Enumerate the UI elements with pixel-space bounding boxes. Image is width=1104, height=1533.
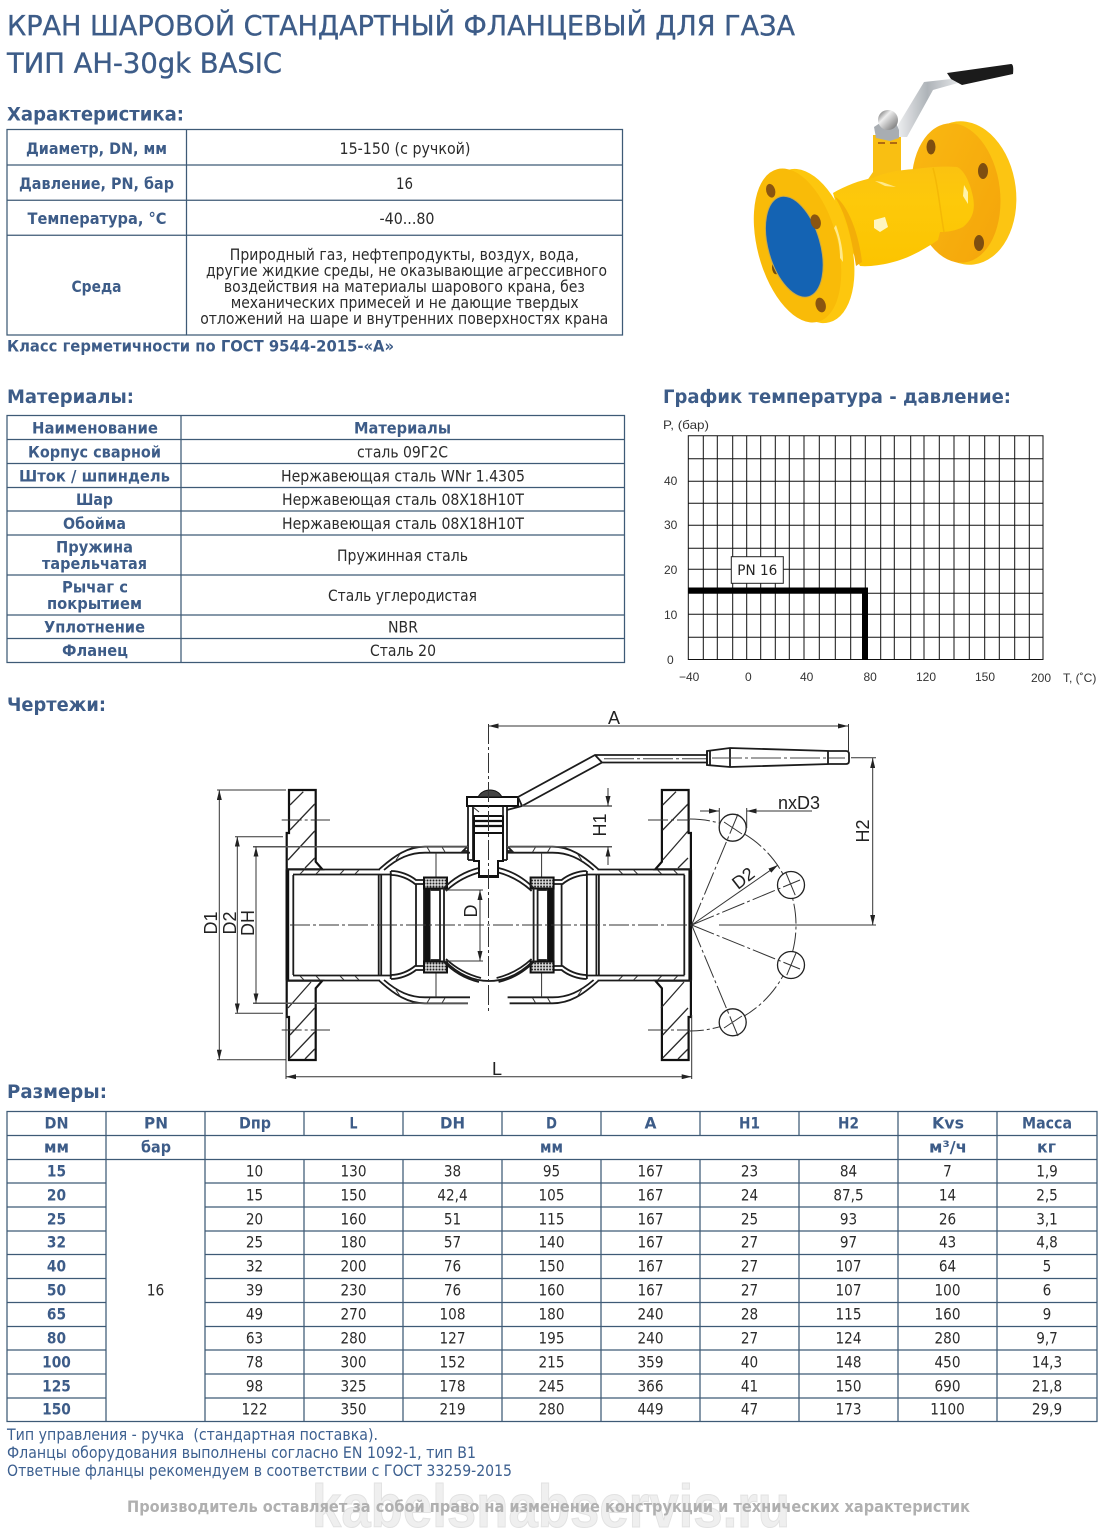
column: H1: 25 [741,1210,758,1229]
dimension D2 bolt circle: D2 [728,863,759,893]
tightness class note: Класс герметичности по ГОСТ 9544-2015-«А» [7,337,394,356]
units row [44,1138,1056,1156]
table: materials: Наименование [32,418,158,437]
column: L: 180 [341,1233,366,1252]
heading: materials: Материалы: [7,386,134,408]
column: H2 [833,1162,864,1419]
column: mass: 3,1 [1036,1210,1058,1229]
column: D: 215 [539,1353,564,1372]
column: DH: 76 [444,1281,461,1300]
header row: Масса [1022,1114,1072,1132]
manufacturer disclaimer: Производитель оставляет за собой право на изменение конструкции и технических характеристик [127,1497,970,1516]
column: DN [42,1161,71,1419]
column: Kvs: 100 [935,1281,960,1300]
dimension D [445,890,483,961]
column: H2: 84 [840,1162,857,1181]
column: L: 130 [341,1162,366,1181]
column: mass: 5 [1043,1257,1051,1276]
table: materials: Сталь углеродистая [328,586,477,605]
chart: temperature vs pressure [663,418,1096,685]
heading: characteristics: Характеристика: [7,104,184,126]
column: H1: 41 [741,1377,758,1396]
column: H1: 28 [741,1305,758,1324]
dimension nxD3: nxD3 [778,793,820,813]
table: materials: Шар [76,490,113,509]
header row: DH [440,1114,465,1132]
column: Kvs: 64 [939,1257,956,1276]
column: Dпр: 32 [246,1257,263,1276]
table: materials: покрытием [47,594,142,613]
dimension D2: D2 [220,911,240,935]
column: H2: 150 [836,1377,861,1396]
body crease [933,168,944,232]
bolt circle [690,814,804,1036]
column: DH: 178 [440,1377,465,1396]
column: H2: 107 [836,1281,861,1300]
table: characteristics: другие жидкие среды, не оказывающие агрессивного [206,261,607,280]
X axis labels: 0 [745,670,752,684]
table: materials: Шток / шпиндель [19,466,170,485]
column: DH: 108 [440,1305,465,1324]
table: characteristics: Природный газ, нефтепродукты, воздух, вода, [230,245,579,264]
column: A: 167 [638,1257,663,1276]
column: mass: 9,7 [1036,1329,1058,1348]
header row: DN [44,1114,68,1132]
photo: gas ball valve [738,64,1024,333]
column: L [341,1162,366,1419]
dimension A: A [608,708,620,728]
heading: dimensions: Размеры: [7,1081,107,1103]
column: Kvs: 43 [939,1233,956,1252]
column: H1 [741,1162,758,1419]
PN 16 label [731,557,783,583]
column: A: 167 [638,1281,663,1300]
left flange [738,159,870,333]
column: Dпр: 15 [246,1186,263,1205]
table: materials: Обойма [63,514,126,533]
column: D: 195 [539,1329,564,1348]
table: materials [7,416,624,662]
column: Kvs: 14 [939,1186,956,1205]
X axis labels: 150 [975,670,995,684]
table: characteristics: 16 [396,174,413,193]
column: H1: 24 [741,1186,758,1205]
Y axis labels [663,418,709,667]
dimension DH: DH [238,910,258,936]
table grid [7,1112,1097,1422]
table: characteristics: Среда [72,277,122,296]
table: materials: Пружина [56,538,133,557]
units row: кг [1037,1138,1056,1156]
column: DH: 152 [440,1353,465,1372]
column: H1: 27 [741,1329,758,1348]
column: DN: 25 [47,1209,66,1229]
column: H2: 107 [836,1257,861,1276]
table: characteristics: Температура, °С [28,209,166,228]
table: characteristics: -40...80 [380,209,434,228]
column: L: 230 [341,1281,366,1300]
column: H2: 97 [840,1233,857,1252]
column: D: 105 [539,1186,564,1205]
stem and neck [463,790,518,878]
heading: drawings: Чертежи: [7,694,106,716]
X axis labels [679,670,1096,685]
dimension nxD3 [700,793,820,828]
column: DN: 150 [42,1399,71,1419]
footnotes [6,1425,512,1480]
flange holes [765,183,827,314]
Y axis labels: 40 [664,474,678,488]
table: materials: тарельчатая [42,554,147,573]
column: DN: 50 [47,1280,66,1300]
table: characteristics: воздействия на материалы шарового крана, без [224,277,585,296]
column: DN: 80 [47,1328,66,1348]
column: L: 200 [341,1257,366,1276]
dimension L [286,1015,692,1079]
dimension H1 [507,788,612,865]
heading: temperature-pressure chart: График температура - давление: [663,386,1011,408]
blue cap [755,190,834,304]
Y axis labels: 20 [664,563,678,577]
column: mass: 6 [1043,1281,1051,1300]
column: A: 167 [638,1186,663,1205]
column: A: 359 [638,1353,663,1372]
column: Dпр: 39 [246,1281,263,1300]
column: A: 167 [638,1233,663,1252]
column: L: 280 [341,1329,366,1348]
dimension H2 [719,758,876,925]
X axis labels: 80 [864,670,877,684]
column: D [539,1162,564,1419]
column: DN: 40 [47,1256,66,1276]
valve body quarter (mirrored) [286,790,481,925]
column: mass: 2,5 [1036,1186,1058,1205]
column: DH: 219 [440,1400,465,1419]
ball lower bore line [445,961,533,981]
nut [874,123,899,141]
dimension H2: H2 [853,819,873,843]
header row: D [546,1114,557,1132]
column: L: 150 [341,1186,366,1205]
column: Kvs: 690 [935,1377,960,1396]
column: mass: 1,9 [1036,1162,1058,1181]
column: A [638,1162,663,1419]
column: DH: 42,4 [437,1186,468,1205]
X axis labels: 200 [1031,671,1051,685]
dimension L: L [492,1059,502,1079]
column: Kvs: 26 [939,1210,956,1229]
table: materials: Нержавеющая сталь 08Х18Н10Т [282,490,524,509]
column: mass: 29,9 [1032,1400,1062,1419]
footnotes: Фланцы оборудования выполнены согласно EN 1092-1, тип В1 [7,1443,476,1462]
header row: L [350,1114,358,1132]
dimension D1: D1 [201,911,221,935]
column: H2: 124 [836,1329,861,1348]
chart grid [688,436,1043,660]
units row: бар [141,1138,171,1156]
column: Kvs: 7 [943,1162,952,1181]
center lines [282,724,691,1030]
column: mass: 4,8 [1036,1233,1058,1252]
Y axis labels: P, (бар) [663,418,709,432]
body [833,167,974,266]
table: characteristics: 15-150 (с ручкой) [340,139,470,158]
units row: м³/ч [929,1138,967,1156]
column: A: 240 [638,1329,663,1348]
lever with grip [507,748,849,810]
table: characteristics: механических примесей и не дающие твердых [231,293,579,312]
rim highlight [834,225,843,262]
table: materials: NBR [388,618,418,637]
column: Dпр: 25 [246,1233,263,1252]
column: DN: 32 [47,1232,66,1252]
column: A: 449 [638,1400,663,1419]
column: H2: 93 [840,1210,857,1229]
column: Dпр: 10 [246,1162,263,1181]
column: L: 325 [341,1377,366,1396]
units row: мм [44,1138,69,1156]
column: Kvs: 160 [935,1305,960,1324]
column: L: 160 [341,1210,366,1229]
table: materials: Фланец [62,641,128,660]
PN 16 limit line [688,590,865,660]
column: mass: 14,3 [1032,1353,1062,1372]
column: DH: 57 [444,1233,461,1252]
X axis labels: −40 [679,670,700,684]
footnotes: Тип управления - ручка (стандартная поставка). [6,1425,378,1444]
column: mass: 9 [1043,1305,1051,1324]
column: H2: 115 [836,1305,861,1324]
table: materials: Корпус сварной [28,442,161,461]
column: DH [437,1162,468,1419]
body highlights [874,217,888,232]
table: materials: Нержавеющая сталь 08Х18Н10Т [282,514,524,533]
X axis labels: 120 [916,670,936,684]
column: Dпр [242,1162,267,1419]
column: L: 270 [341,1305,366,1324]
table: materials: Рычаг с [62,578,128,597]
column: H1: 47 [741,1400,758,1419]
table: materials: Пружинная сталь [337,546,468,565]
lever [895,78,960,137]
column: D: 245 [539,1377,564,1396]
column: DH: 127 [440,1329,465,1348]
dimension D2 bolt circle [692,863,778,925]
column: Kvs: 1100 [930,1400,965,1419]
column: H2: 148 [836,1353,861,1372]
column: DN: 65 [47,1304,66,1324]
header row: Dпр [239,1114,271,1132]
column: A: 167 [638,1210,663,1229]
column: DH: 51 [444,1210,461,1229]
column: Kvs: 450 [935,1353,960,1372]
column: D: 280 [539,1400,564,1419]
neck [862,135,909,188]
column: DH: 76 [444,1257,461,1276]
dimension D: D [461,904,481,918]
column: A: 366 [638,1377,663,1396]
PN 16 label: PN 16 [737,563,777,579]
table: materials: Уплотнение [44,618,145,637]
column: Dпр: 98 [246,1377,263,1396]
units row: мм [540,1138,563,1156]
table: characteristics: отложений на шаре и внутренних поверхностях крана [200,309,608,328]
title: ТИП АН-30gk BASIC [6,48,282,80]
column: DN: 15 [47,1161,66,1181]
dimension D2 [220,837,283,1013]
column: L: 300 [341,1353,366,1372]
X axis labels: 40 [800,670,814,684]
column: D: 140 [539,1233,564,1252]
header row: A [644,1114,657,1132]
column: DN: 125 [42,1376,71,1396]
footnotes: Ответные фланцы рекомендуем в соответствии с ГОСТ 33259-2015 [7,1461,512,1480]
column: H1: 27 [741,1257,758,1276]
table: materials: Материалы [354,418,451,437]
left hub [835,197,862,266]
column: Dпр: 49 [246,1305,263,1324]
Y axis labels: 30 [664,518,678,532]
column: D: 180 [539,1305,564,1324]
right flange [904,115,1024,271]
Y axis labels: 0 [667,653,674,667]
column: L: 350 [341,1400,366,1419]
header row: H1 [739,1114,760,1132]
table: characteristics [7,130,622,335]
column: D: 150 [539,1257,564,1276]
column: A: 167 [638,1162,663,1181]
column: DN: 20 [47,1185,66,1205]
dimension D1 [201,790,286,1060]
technical drawing [201,708,876,1079]
column: PN: 16 [147,1280,164,1300]
flange hatching [288,792,688,1059]
column: Dпр: 20 [246,1210,263,1229]
dome nut [878,110,898,130]
column: A: 240 [638,1305,663,1324]
dimension DH [238,847,468,1003]
column: H1: 27 [741,1281,758,1300]
column: Dпр: 122 [242,1400,267,1419]
table: dimensions [7,1112,1097,1422]
column: mass [1032,1162,1062,1419]
X axis labels: T, (˚C) [1063,671,1096,685]
column: H1: 27 [741,1233,758,1252]
column: Kvs [930,1162,965,1419]
column: D: 95 [543,1162,560,1181]
column: Kvs: 280 [935,1329,960,1348]
header row: PN [144,1114,168,1132]
dimension H1: H1 [590,813,610,837]
column: mass: 21,8 [1032,1377,1062,1396]
neck top slots [878,142,897,144]
table: materials: сталь 09Г2С [357,442,448,461]
title [6,8,795,80]
header row: H2 [838,1114,859,1132]
title: КРАН ШАРОВОЙ СТАНДАРТНЫЙ ФЛАНЦЕВЫЙ ДЛЯ ГАЗА [7,8,795,42]
header row: Kvs [932,1114,964,1132]
column: D: 160 [539,1281,564,1300]
Y axis labels: 10 [664,608,678,622]
handle grip [947,64,1013,85]
column: H1: 23 [741,1162,758,1181]
table: characteristics: Диаметр, DN, мм [26,139,167,158]
header row [44,1114,1072,1132]
column: H1: 40 [741,1353,758,1372]
column: D: 115 [539,1210,564,1229]
column: H2: 173 [836,1400,861,1419]
table: materials: Нержавеющая сталь WNr 1.4305 [281,466,525,485]
table: characteristics: Давление, PN, бар [19,174,174,193]
table: materials: Сталь 20 [370,641,436,660]
column: DN: 100 [42,1352,71,1372]
column: H2: 87,5 [833,1186,864,1205]
column: Dпр: 78 [246,1353,263,1372]
column: DH: 38 [444,1162,461,1181]
column: Dпр: 63 [246,1329,263,1348]
